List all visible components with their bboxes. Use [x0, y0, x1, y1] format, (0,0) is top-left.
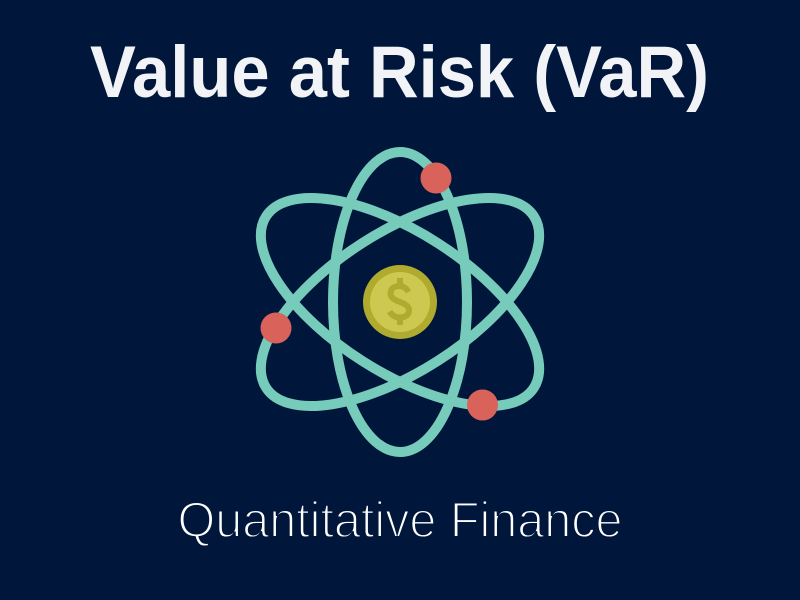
- icon: atom with dollar coin: [228, 152, 572, 452]
- electron: bottom right: [467, 390, 498, 420]
- orbit: tilted down to the right: [228, 157, 572, 447]
- title: Value at Risk (VaR): [90, 32, 709, 113]
- dollar sign: [390, 278, 409, 325]
- orbit: vertical: [333, 152, 467, 452]
- coin: [363, 265, 437, 339]
- electron: left: [260, 312, 292, 344]
- orbit: tilted up to the right: [228, 157, 572, 447]
- electron: top: [420, 162, 452, 194]
- subtitle: Quantitative Finance: [178, 492, 622, 548]
